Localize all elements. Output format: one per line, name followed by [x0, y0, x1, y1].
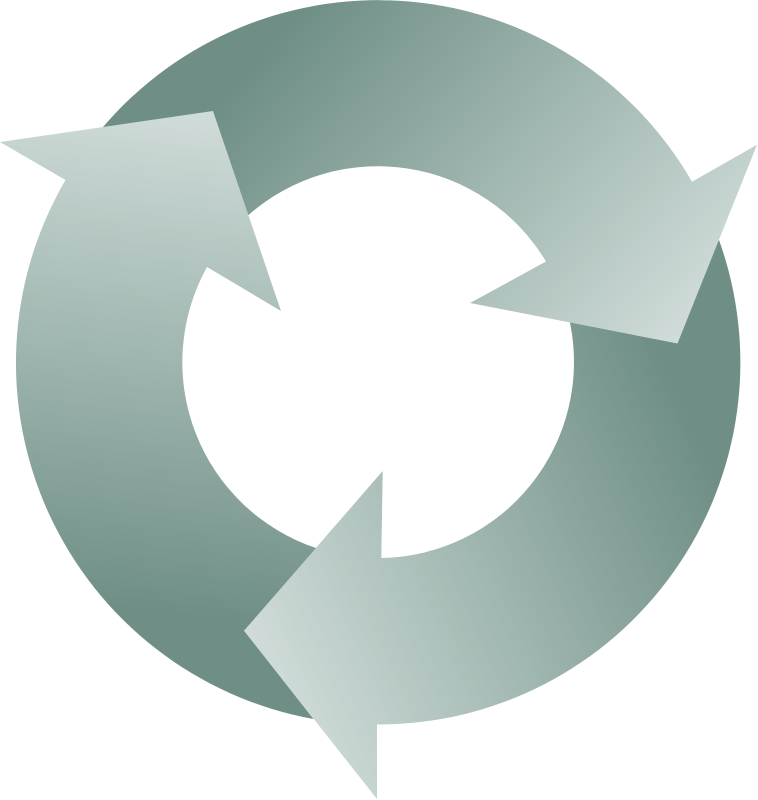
arrow: top segment pointing clockwise to the right — [103, 0, 757, 344]
arrow: left segment pointing upward — [0, 111, 316, 719]
arrow: right and bottom segment pointing to the lower left — [244, 240, 740, 799]
